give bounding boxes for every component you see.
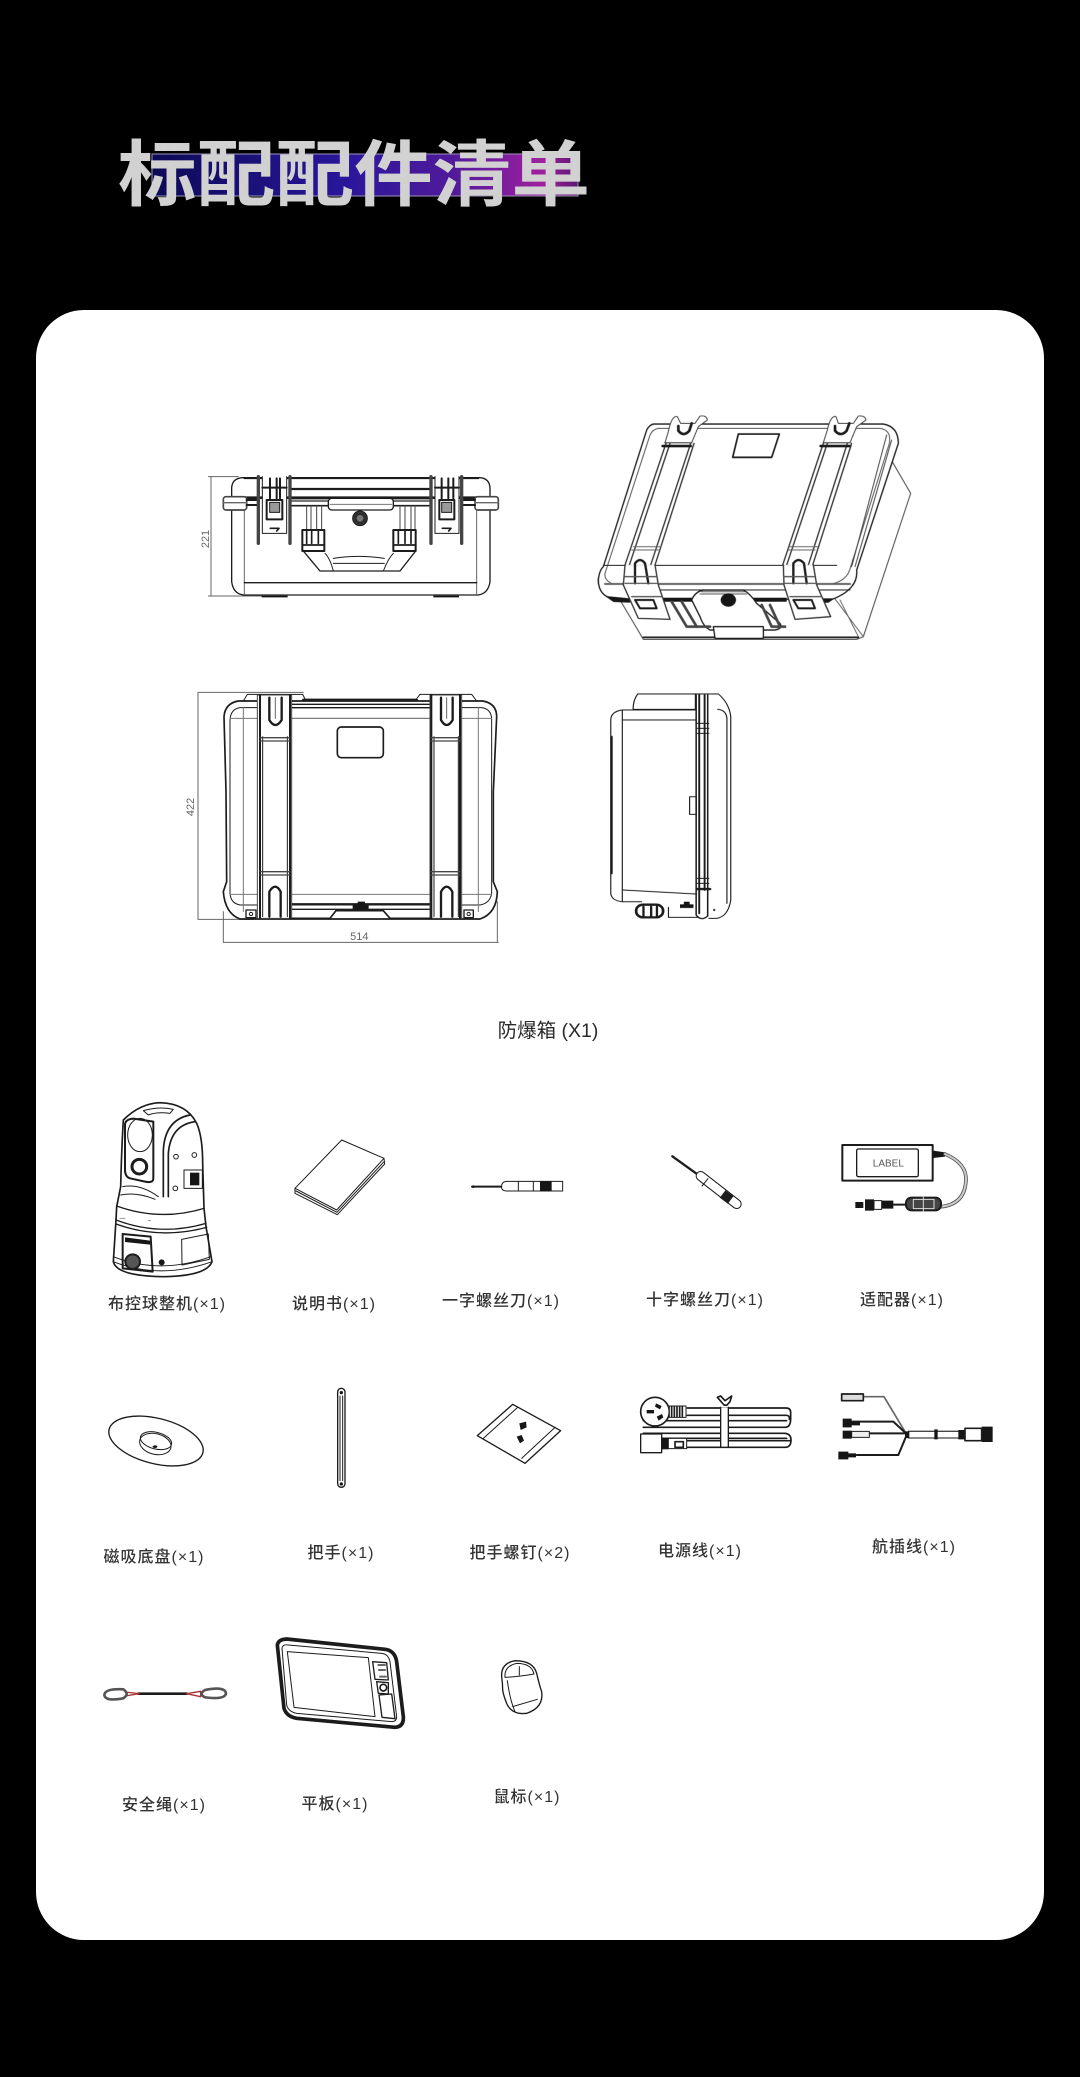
row 1 icons: phillips screwdriver, adapter — [672, 1145, 966, 1211]
title — [118, 136, 590, 216]
icon: camera — [113, 1103, 212, 1277]
icon: phillips screwdriver — [672, 1156, 737, 1204]
row 2 icons: power cable, aviation cable — [641, 1394, 993, 1459]
label: handle: 把手(×1) — [308, 1544, 374, 1562]
row 2 icons: disc, handle, screw bag — [104, 1388, 561, 1487]
icon: aviation cable — [838, 1394, 993, 1459]
left latch — [258, 477, 290, 543]
label: magnetic base: 磁吸底盘(×1) — [104, 1548, 204, 1566]
right strap — [783, 416, 866, 565]
icon: tablet — [277, 1639, 403, 1727]
icon: handle — [338, 1388, 345, 1487]
bottom right latch — [783, 560, 831, 619]
label: camera: 布控球整机(×1) — [108, 1295, 226, 1313]
label: tablet: 平板(×1) — [302, 1795, 368, 1813]
case caption: 防爆箱 (X1) — [498, 1020, 598, 1042]
bottom left latch — [623, 560, 670, 619]
dimension 221: 221 — [200, 530, 212, 548]
dimension 422: 422 — [185, 798, 197, 816]
label: manual: 说明书(×1) — [292, 1295, 376, 1313]
label: adapter: 适配器(×1) — [860, 1291, 944, 1309]
icon: power cable — [641, 1396, 791, 1453]
row 3 icons: rope, tablet, mouse — [104, 1639, 542, 1727]
icon: screw bag — [477, 1404, 561, 1463]
item labels — [104, 1291, 956, 1814]
label: phillips screwdriver: 十字螺丝刀(×1) — [646, 1291, 764, 1309]
row 1 icons: camera, manual, flat screwdriver — [113, 1103, 563, 1277]
case isometric view — [598, 416, 911, 639]
dimension 514: 514 — [350, 931, 368, 943]
label: flat screwdriver: 一字螺丝刀(×1) — [442, 1292, 560, 1310]
panel: accessories — [36, 310, 1044, 1940]
icon: mouse — [502, 1661, 542, 1714]
case front view — [200, 477, 498, 597]
right latch — [431, 477, 462, 543]
label: aviation cable: 航插线(×1) — [872, 1537, 956, 1556]
label: handle screws: 把手螺钉(×2) — [470, 1544, 570, 1562]
label: safety rope: 安全绳(×1) — [122, 1795, 206, 1814]
title gradient band — [152, 154, 578, 196]
adapter label text: LABEL — [873, 1159, 904, 1170]
case side view — [611, 694, 731, 919]
title text: 标配配件清单 — [118, 136, 590, 216]
icon: magnetic base — [104, 1407, 208, 1475]
drawing group: case and accessories — [104, 416, 993, 1727]
label: mouse: 鼠标(×1) — [494, 1788, 560, 1806]
icon: adapter — [842, 1145, 966, 1211]
icon: flat screwdriver — [472, 1181, 563, 1191]
icon: safety rope — [104, 1689, 226, 1699]
label: power cable: 电源线(×1) — [658, 1542, 742, 1560]
icon: manual — [295, 1140, 385, 1215]
left strap — [625, 416, 707, 565]
case top view — [185, 692, 498, 943]
